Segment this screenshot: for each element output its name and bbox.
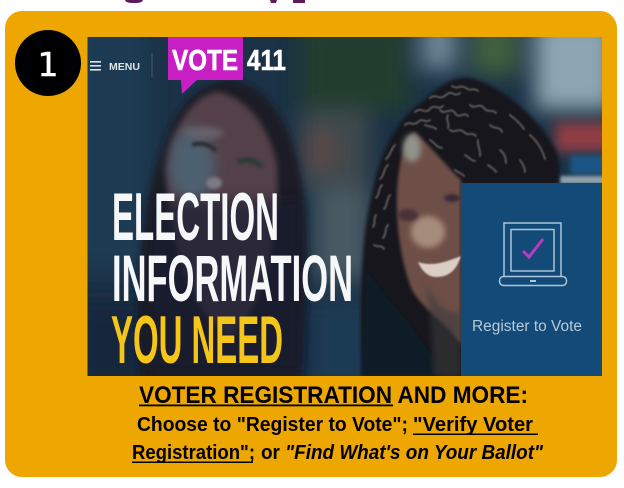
VOTE 411 logo: 411 — [247, 45, 286, 77]
number badge — [15, 30, 81, 96]
caption line 3 underlined: Registration"; — [132, 442, 255, 464]
register to vote tile — [461, 183, 602, 376]
nav menu — [90, 53, 152, 77]
nav menu: MENU — [109, 62, 140, 73]
left woman — [138, 80, 307, 380]
caption line 2: Choose to "Register to Vote"; — [137, 414, 408, 436]
headline: INFORMATION — [112, 241, 353, 315]
caption line 2 underlined: "Verify Voter — [413, 414, 533, 436]
caption line 3: or "Find What's on Your Ballot" — [261, 442, 543, 464]
headline: YOU NEED — [111, 302, 283, 378]
headline — [112, 192, 351, 364]
register to vote tile: Register to Vote — [472, 318, 582, 335]
cropped heading remnant — [125, 0, 305, 3]
VOTE 411 logo — [168, 37, 286, 94]
headline: ELECTION — [112, 179, 279, 255]
number badge: 1 — [38, 45, 58, 84]
VOTE 411 logo: VOTE — [172, 45, 238, 77]
caption — [132, 382, 543, 464]
right woman — [361, 78, 560, 376]
icon: laptop with check — [500, 223, 566, 286]
website screenshot photo — [88, 37, 602, 376]
caption heading: VOTER REGISTRATION AND MORE: — [139, 382, 528, 409]
